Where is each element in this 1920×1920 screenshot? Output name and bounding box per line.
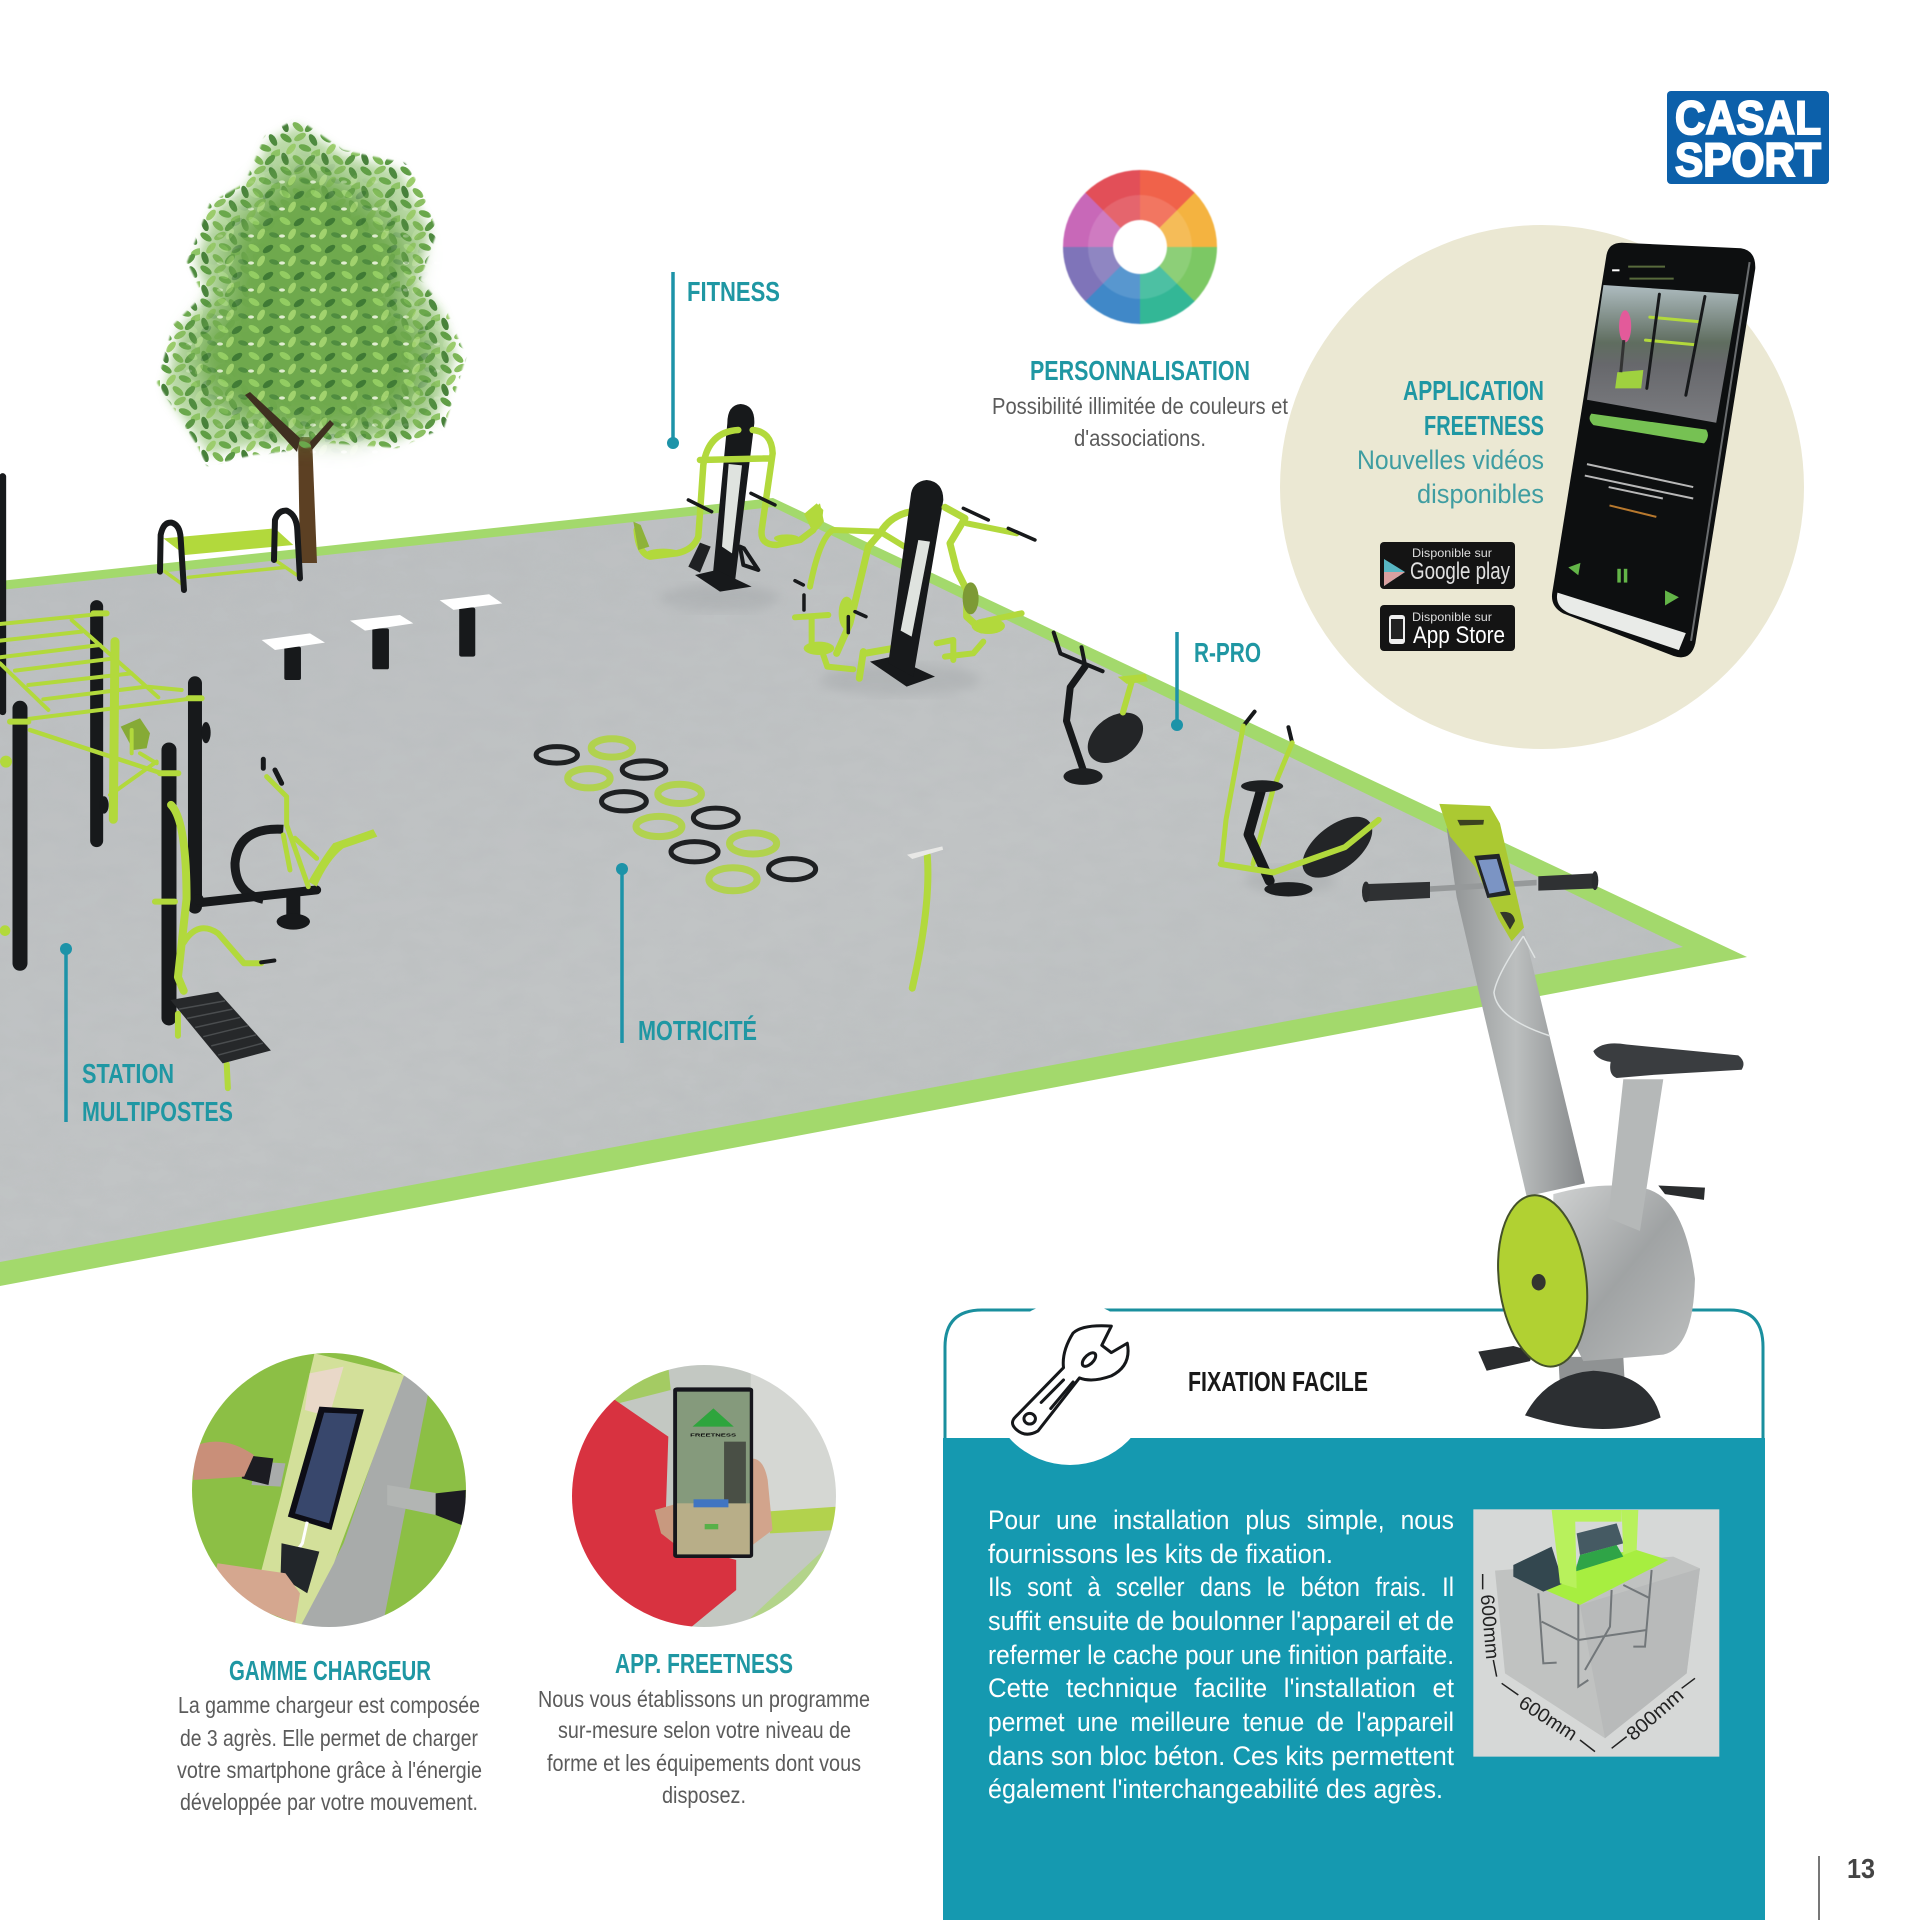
- fixation description text: permet une meilleure tenue de l'appareil: [988, 1707, 1454, 1737]
- fitness tower one: [633, 404, 823, 592]
- personnalisation text block: d'associations.: [1074, 425, 1206, 451]
- fixation description text: refermer le cache pour une finition parfaite.: [988, 1640, 1454, 1670]
- text: app freetness: APP. FREETNESS: [615, 1648, 793, 1679]
- text: gamme chargeur: GAMME CHARGEUR: [229, 1655, 431, 1686]
- fixation description text: Cette technique facilite l'installation et: [988, 1673, 1454, 1703]
- fitness tower two: [795, 480, 1035, 687]
- circle photo: gamme chargeur: [184, 1347, 474, 1633]
- label: fitness: FITNESS: [687, 276, 780, 307]
- concrete surface: [0, 507, 1683, 1262]
- panel teal body: [943, 1438, 1765, 1920]
- tree foliage: [156, 120, 467, 467]
- icon: wrench: [1012, 1326, 1128, 1434]
- text: gamme chargeur: développée par votre mouvement.: [180, 1789, 478, 1815]
- fixation description text: [988, 1505, 1454, 1804]
- badge: app store: Disponible sur: [1412, 610, 1492, 624]
- personnalisation text block: [992, 355, 1289, 451]
- text: gamme chargeur: La gamme chargeur est composée: [178, 1692, 480, 1718]
- text: gamme chargeur: [177, 1655, 482, 1815]
- label: station multipostes: STATION: [82, 1058, 174, 1089]
- text: app freetness: Nous vous établissons un programme: [538, 1686, 870, 1712]
- step platforms: [262, 615, 413, 680]
- circle photo: app freetness: FREETNESS: [690, 1433, 736, 1438]
- circle photo: app freetness: [567, 1360, 843, 1633]
- foundation diagram: 600mm: [1476, 1594, 1502, 1660]
- label: station multipostes: [60, 943, 233, 1127]
- fixation description text: Ils sont à sceller dans le béton frais. Il: [988, 1572, 1454, 1602]
- text: app freetness: sur-mesure selon votre niveau de: [558, 1717, 851, 1743]
- panel: application freetness: [1280, 225, 1804, 749]
- badge: google play: Disponible sur: [1412, 546, 1492, 560]
- personnalisation text block: PERSONNALISATION: [1030, 355, 1250, 386]
- badge: google play: [1380, 542, 1515, 589]
- label: station multipostes: MULTIPOSTES: [82, 1096, 233, 1127]
- personnalisation text block: Possibilité illimitée de couleurs et: [992, 393, 1289, 419]
- air walker machine: [193, 759, 377, 930]
- text: app freetness: [538, 1648, 870, 1808]
- fixation description text: dans son bloc béton. Ces kits permettent: [988, 1741, 1454, 1771]
- app heading and text: FREETNESS: [1424, 410, 1544, 441]
- tree trunk: [298, 437, 317, 563]
- multi-station frame: [0, 477, 211, 1018]
- white circle behind icon: [988, 1301, 1152, 1465]
- green border: [0, 498, 1747, 1286]
- foundation diagram: 800mm: [1623, 1685, 1688, 1745]
- foundation diagram: 600mm: [1515, 1693, 1581, 1746]
- balance post: [907, 846, 943, 988]
- smartphone with app screen: [1552, 243, 1755, 657]
- app heading and text: Nouvelles vidéos: [1357, 445, 1544, 475]
- app heading and text: disponibles: [1417, 479, 1544, 509]
- text: app freetness: forme et les équipements dont vous: [547, 1750, 861, 1776]
- logo: casal sport: SPORT: [1675, 133, 1821, 186]
- app heading and text: [1357, 375, 1544, 509]
- R-PRO exercise bike: [1054, 633, 1153, 785]
- fixation description text: également l'interchangeabilité des agrès.: [988, 1774, 1443, 1804]
- logo: casal sport: CASAL: [1675, 91, 1821, 144]
- lateral arm and bench station: [170, 805, 274, 1088]
- fixation description text: suffit ensuite de boulonner l'appareil et de: [988, 1606, 1454, 1636]
- fixation panel: [943, 1301, 1765, 1920]
- charger exercise bike: [1362, 804, 1744, 1429]
- elliptical machine: [1221, 712, 1387, 896]
- text: app freetness: disposez.: [662, 1782, 746, 1808]
- badge: google play: Google play: [1410, 558, 1510, 585]
- text: gamme chargeur: votre smartphone grâce à l'énergie: [177, 1757, 482, 1783]
- tree: [156, 120, 467, 563]
- fixation description text: fournissons les kits de fixation.: [988, 1539, 1333, 1569]
- play area ground: [0, 498, 1747, 1286]
- foundation diagram: [1473, 1509, 1719, 1757]
- text: gamme chargeur: de 3 agrès. Elle permet de charger: [180, 1725, 478, 1751]
- label: r-pro: R-PRO: [1194, 637, 1261, 668]
- logo: casal sport: [1667, 91, 1829, 186]
- panel top outline: [945, 1310, 1763, 1440]
- label: motricite: [616, 863, 757, 1046]
- label: fitness: [667, 272, 780, 449]
- label: r-pro: [1171, 632, 1261, 731]
- page number: 13: [1847, 1853, 1875, 1884]
- badge: app store: [1380, 605, 1515, 651]
- heading: fixation facile: FIXATION FACILE: [1188, 1366, 1368, 1397]
- page number: [1819, 1853, 1875, 1920]
- app heading and text: APPLICATION: [1403, 375, 1544, 406]
- fixation description text: Pour une installation plus simple, nous: [988, 1505, 1454, 1535]
- motricity rings: [536, 739, 816, 891]
- icon: colour wheel: [1063, 170, 1217, 324]
- badge: app store: App Store: [1413, 622, 1505, 649]
- bench: [160, 511, 300, 590]
- label: motricite: MOTRICITÉ: [638, 1015, 757, 1046]
- step platform three: [440, 594, 502, 657]
